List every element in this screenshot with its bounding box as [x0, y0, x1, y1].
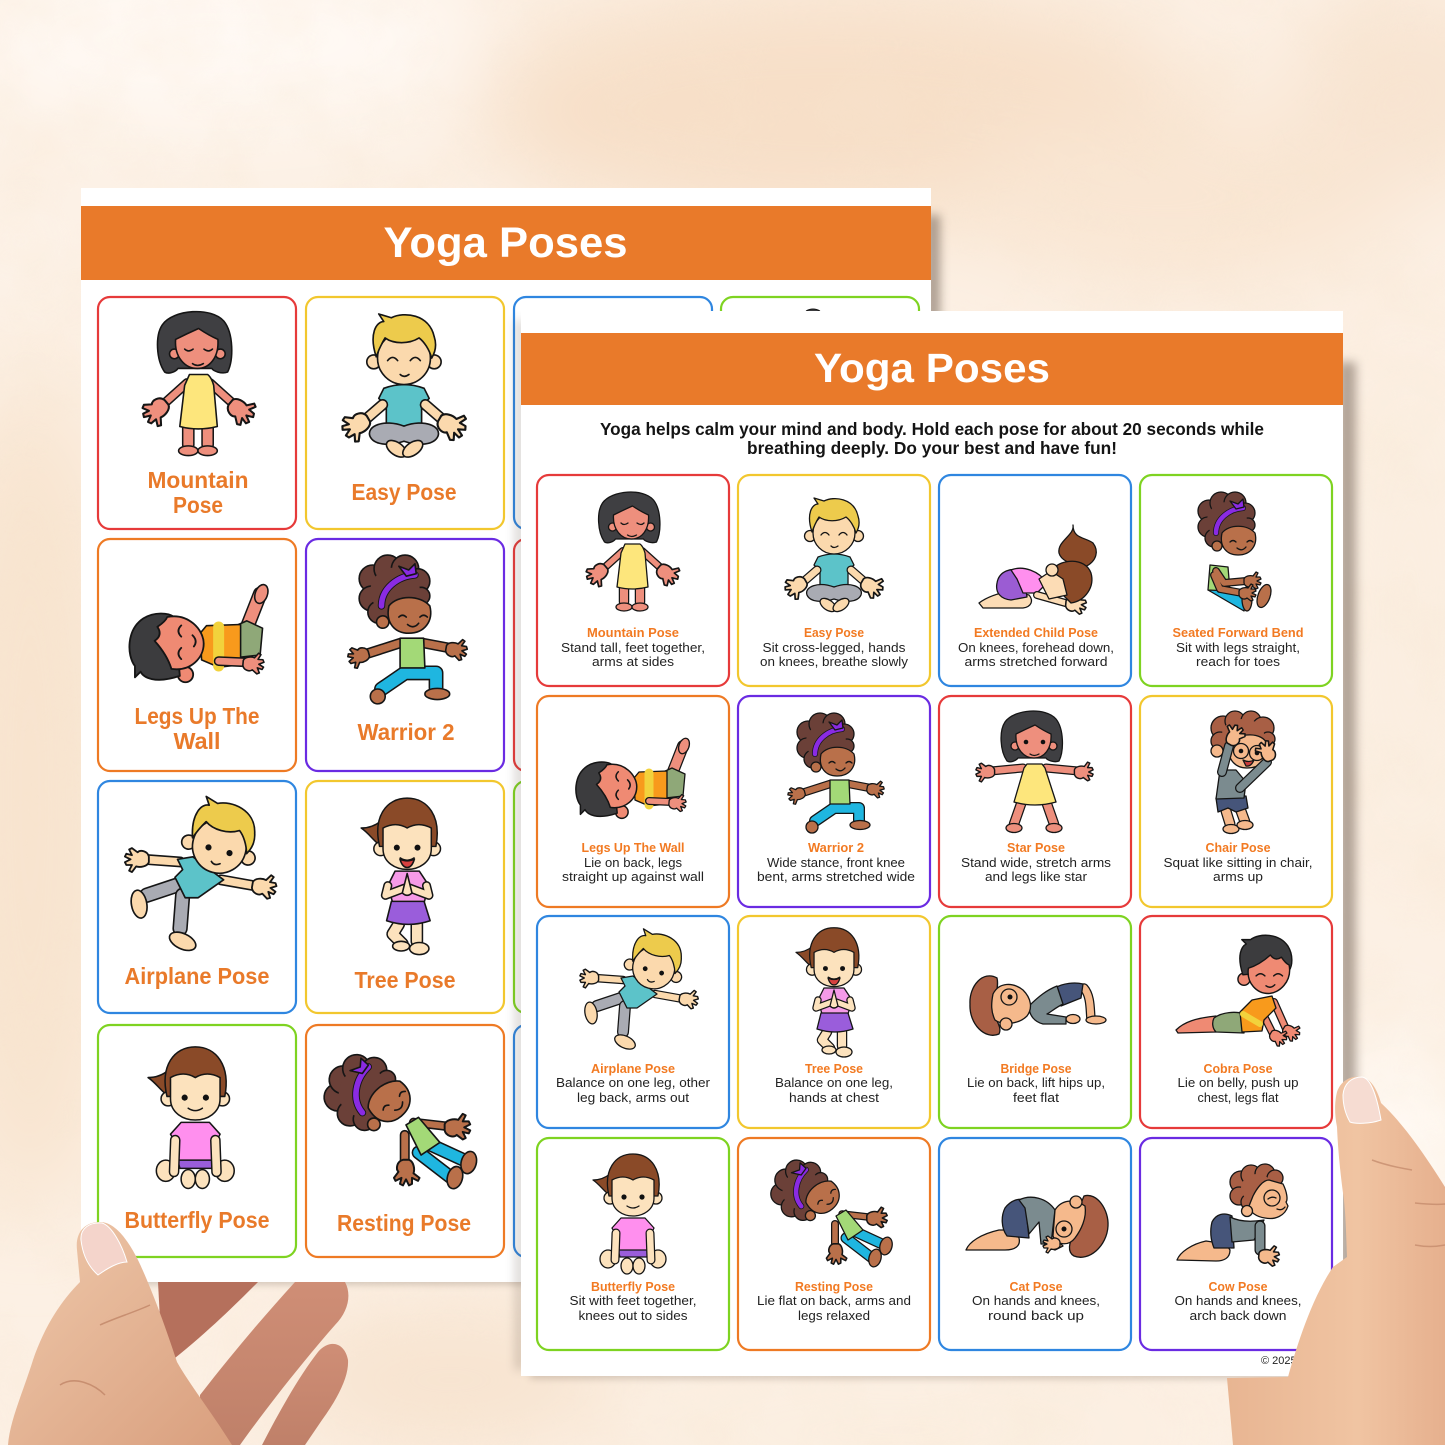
card: Tree Pose: Balance on one leg,: [775, 1075, 893, 1090]
illustration: cobra pose: [1176, 935, 1303, 1048]
card: Star Pose: Star Pose: [1007, 840, 1065, 855]
back card: Tree Pose: [306, 781, 504, 1013]
card: Seated Forward Bend: Seated Forward Bend: [1172, 625, 1304, 640]
card: Tree Pose: [738, 916, 930, 1128]
illustration: legs up the wall: [576, 737, 691, 818]
front title banner: [521, 333, 1343, 405]
intro text: Yoga helps calm your mind and body. Hold each pose for about 20 seconds while: [600, 419, 1264, 439]
card: Extended Child Pose: On knees, forehead down,: [958, 640, 1114, 655]
back card: Resting Pose: Resting Pose: [337, 1210, 471, 1236]
card: Mountain Pose: Mountain Pose: [587, 625, 679, 640]
card: Chair Pose: Chair Pose: [1206, 840, 1270, 855]
card: Warrior 2: bent, arms stretched wide: [757, 869, 915, 884]
ring finger: [158, 1282, 258, 1358]
thumb and palm: [8, 1222, 232, 1445]
card: Extended Child Pose: arms stretched forward: [964, 654, 1108, 669]
back card: Legs Up The Wall: Wall: [174, 728, 220, 754]
card: Cobra Pose: Cobra Pose: [1204, 1061, 1272, 1076]
illustration: chair pose: [1211, 711, 1279, 834]
illustration: butterfly pose: [593, 1154, 666, 1274]
card: Warrior 2: Wide stance, front knee: [767, 855, 905, 870]
knuckle creases: [1372, 1160, 1445, 1246]
card: Legs Up The Wall: Legs Up The Wall: [582, 840, 684, 855]
back card: partly hidden blue: [514, 1025, 712, 1257]
card: Legs Up The Wall: Lie on back, legs: [584, 855, 682, 870]
palm and fingers: [1227, 1077, 1445, 1445]
back card: Easy Pose: [306, 297, 504, 529]
card: Resting Pose: legs relaxed: [798, 1308, 870, 1323]
card: Cat Pose: [939, 1138, 1131, 1350]
card: Airplane Pose: [537, 916, 729, 1128]
card: Butterfly Pose: Sit with feet together,: [570, 1293, 696, 1308]
back card: partly hidden red: [514, 539, 712, 771]
back card: Legs Up The Wall: Legs Up The: [134, 703, 260, 729]
card: Easy Pose: [738, 475, 930, 686]
card: Cow Pose: Cow Pose: [1208, 1279, 1268, 1294]
card: Butterfly Pose: Butterfly Pose: [591, 1279, 675, 1294]
card: Seated Forward Bend: reach for toes: [1196, 654, 1281, 669]
card: Cow Pose: [1140, 1138, 1332, 1350]
back card: Mountain Pose: [98, 297, 296, 529]
intro text: breathing deeply. Do your best and have fun!: [747, 438, 1117, 458]
sheet paper: [521, 311, 1343, 1376]
card: Warrior 2: Warrior 2: [808, 840, 864, 855]
back card: partly hidden green: [514, 781, 712, 1013]
card: Tree Pose: hands at chest: [789, 1090, 879, 1105]
card: Mountain Pose: arms at sides: [592, 654, 675, 669]
back card: Mountain Pose: Pose: [173, 492, 223, 518]
card: Cobra Pose: Lie on belly, push up: [1178, 1075, 1298, 1090]
card: Resting Pose: Resting Pose: [795, 1279, 873, 1294]
illustration: bridge pose: [970, 976, 1106, 1035]
illustration: resting pose: [761, 1149, 894, 1268]
card: Tree Pose: Tree Pose: [805, 1061, 863, 1076]
left hand: [8, 1222, 348, 1445]
thumb nail: [81, 1223, 127, 1275]
thumb crease: [60, 1305, 150, 1395]
intro text: [600, 419, 1264, 458]
back sheet: [81, 188, 940, 1284]
card: Extended Child Pose: Extended Child Pose: [974, 625, 1098, 640]
illustration: star pose: [976, 711, 1093, 832]
card: Bridge Pose: Lie on back, lift hips up,: [967, 1075, 1105, 1090]
back title banner: [81, 206, 931, 280]
illustration: mountain pose: [582, 492, 683, 611]
front sheet: [515, 311, 1356, 1378]
card: Cat Pose: Cat Pose: [1010, 1279, 1062, 1294]
middle finger: [200, 1282, 348, 1445]
card: Mountain Pose: Stand tall, feet together,: [561, 640, 705, 655]
card: Airplane Pose: leg back, arms out: [577, 1090, 689, 1105]
back title banner: Yoga Poses: [384, 219, 628, 267]
card: Warrior 2: [738, 696, 930, 907]
card: Resting Pose: [738, 1138, 930, 1350]
right hand: [1227, 1077, 1445, 1445]
card: Resting Pose: Lie flat on back, arms and: [757, 1293, 911, 1308]
card: Mountain Pose: [537, 475, 729, 686]
back card: Butterfly Pose: [98, 1025, 296, 1257]
card: Butterfly Pose: [537, 1138, 729, 1350]
back card: Easy Pose: Easy Pose: [352, 479, 456, 505]
illustration: seated forward bend: [1198, 492, 1274, 611]
back card: Tree Pose: Tree Pose: [354, 967, 456, 993]
card: Easy Pose: Easy Pose: [804, 625, 864, 640]
card: Bridge Pose: Bridge Pose: [1000, 1061, 1072, 1076]
illustration: tree pose: [796, 928, 862, 1057]
card: Cat Pose: round back up: [988, 1308, 1084, 1323]
illustration: airplane pose: [580, 926, 700, 1052]
sheet paper: [81, 188, 931, 1282]
back card: partly hidden green: [721, 297, 919, 529]
front sheet shadow: [515, 320, 1356, 1378]
back card: Butterfly Pose: Butterfly Pose: [124, 1207, 270, 1233]
card: Cat Pose: On hands and knees,: [972, 1293, 1100, 1308]
illustration: cow pose: [1177, 1164, 1288, 1267]
card: Butterfly Pose: knees out to sides: [578, 1308, 688, 1323]
card: Cobra Pose: chest, legs flat: [1198, 1090, 1279, 1105]
card: Bridge Pose: feet flat: [1013, 1090, 1059, 1105]
card: Legs Up The Wall: straight up against wall: [562, 869, 704, 884]
illustration: easy pose: [781, 498, 887, 614]
card: Cow Pose: On hands and knees,: [1174, 1293, 1302, 1308]
card: Star Pose: [939, 696, 1131, 907]
card: Seated Forward Bend: [1140, 475, 1332, 686]
back card: Airplane Pose: Airplane Pose: [124, 963, 270, 989]
card: Easy Pose: Sit cross-legged, hands: [762, 640, 906, 655]
front title banner: Yoga Poses: [814, 345, 1050, 391]
card: Legs Up The Wall: [537, 696, 729, 907]
card: Easy Pose: on knees, breathe slowly: [760, 654, 909, 669]
illustration: extended child pose: [979, 525, 1096, 615]
card: Airplane Pose: Balance on one leg, other: [556, 1075, 711, 1090]
card: Chair Pose: arms up: [1213, 869, 1263, 884]
back card: Airplane Pose: [98, 781, 296, 1013]
back sheet shadow: [90, 215, 940, 1284]
card: Chair Pose: [1140, 696, 1332, 907]
card: Extended Child Pose: [939, 475, 1131, 686]
little finger: [262, 1344, 348, 1445]
back card: Resting Pose: [306, 1025, 504, 1257]
card: Cobra Pose: [1140, 916, 1332, 1128]
card: Bridge Pose: [939, 916, 1131, 1128]
card: Star Pose: Stand wide, stretch arms: [961, 855, 1112, 870]
card: Cow Pose: arch back down: [1190, 1308, 1286, 1323]
back card: Warrior 2: Warrior 2: [358, 719, 454, 745]
copyright: © 2025: [1261, 1355, 1297, 1367]
back card: Mountain Pose: Mountain: [148, 467, 248, 493]
thumb nail: [1343, 1077, 1381, 1123]
back card: Legs Up The Wall: [98, 539, 296, 771]
card: Chair Pose: Squat like sitting in chair,: [1164, 855, 1312, 870]
back card: partly hidden blue: [514, 297, 712, 529]
card: Star Pose: and legs like star: [985, 869, 1088, 884]
card: Airplane Pose: Airplane Pose: [591, 1061, 675, 1076]
illustration: warrior 2: [786, 713, 885, 833]
back card: Warrior 2: [306, 539, 504, 771]
card: Seated Forward Bend: Sit with legs straight,: [1176, 640, 1300, 655]
illustration: cat pose: [966, 1195, 1108, 1257]
